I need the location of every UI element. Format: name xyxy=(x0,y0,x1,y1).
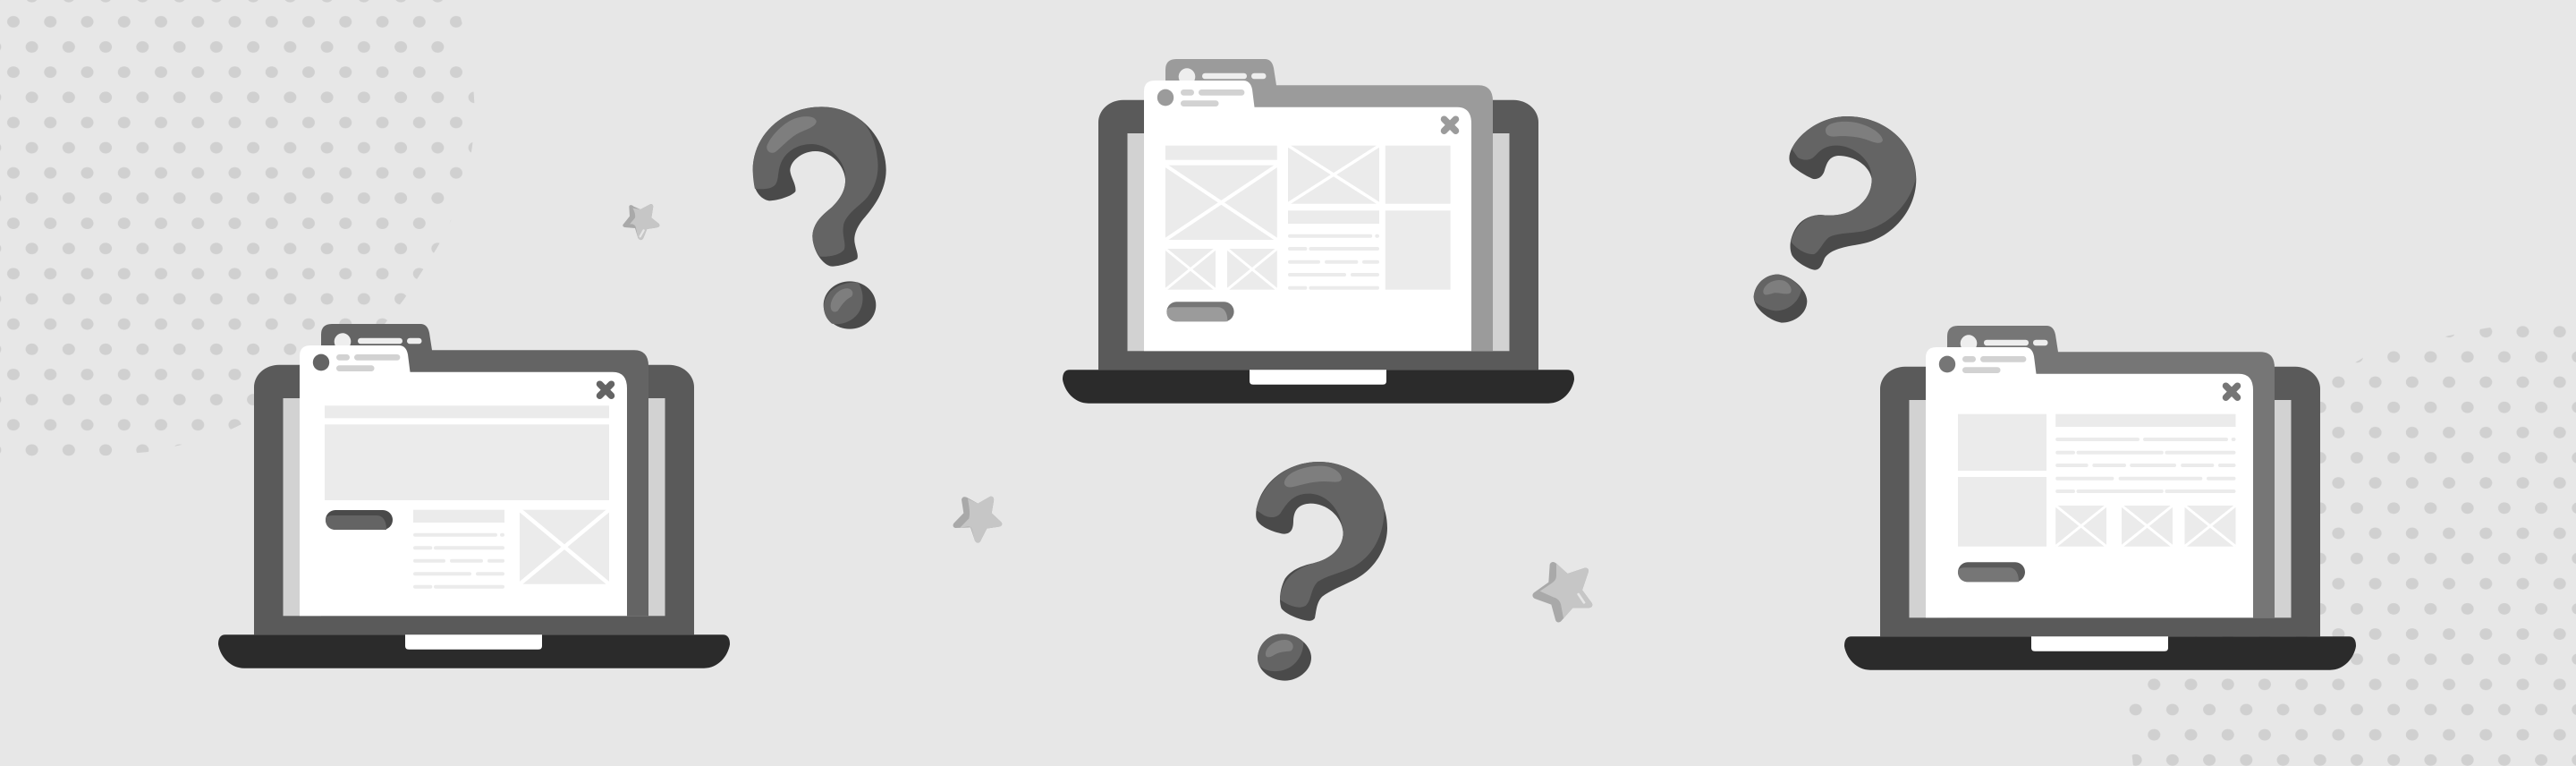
button xyxy=(1958,562,2025,582)
icon: close xyxy=(1444,119,1456,131)
dotted blob: top left xyxy=(0,0,475,465)
laptop base xyxy=(1063,370,1574,404)
laptop screen xyxy=(283,398,665,616)
laptop screen xyxy=(1909,400,2292,617)
laptop notch xyxy=(2031,636,2168,651)
text lines xyxy=(2057,439,2234,491)
text lines xyxy=(1290,236,1377,288)
large image placeholder xyxy=(1165,166,1277,240)
dotted blob: bottom right xyxy=(2127,315,2576,766)
laptop notch xyxy=(405,634,542,650)
button xyxy=(1166,302,1234,321)
small image placeholder 1 xyxy=(1165,249,1216,290)
front browser window xyxy=(1926,347,2253,617)
back browser window xyxy=(1947,326,2275,617)
question mark: upper right xyxy=(1754,116,1916,323)
front browser window xyxy=(300,345,627,616)
star: upper left xyxy=(623,204,659,240)
laptop base xyxy=(1844,636,2356,670)
icon: close xyxy=(2225,386,2238,397)
square placeholder 1 xyxy=(1958,414,2046,471)
star: lower left xyxy=(953,497,1002,543)
small image placeholder 2 xyxy=(1227,249,1277,290)
square placeholder 1 xyxy=(1385,146,1451,204)
laptop lid xyxy=(1880,367,2320,636)
laptop: center xyxy=(1063,59,1574,404)
question mark: bottom center xyxy=(1256,462,1387,681)
image placeholder 1 xyxy=(2055,506,2106,547)
laptop: right xyxy=(1844,326,2356,670)
image placeholder 3 xyxy=(2184,506,2236,547)
front browser window xyxy=(1144,81,1471,351)
title bar placeholder xyxy=(325,405,609,418)
text lines xyxy=(415,535,503,587)
laptop screen xyxy=(1127,133,1510,351)
question mark: upper left xyxy=(753,106,886,329)
image placeholder 2 xyxy=(2122,506,2173,547)
medium image placeholder xyxy=(1288,146,1379,204)
laptop: left xyxy=(218,324,730,668)
laptop lid xyxy=(254,365,694,634)
heading placeholder xyxy=(413,510,504,523)
heading placeholder xyxy=(1165,146,1277,160)
button xyxy=(326,510,393,530)
back browser window xyxy=(1165,59,1493,351)
icon: close xyxy=(599,384,612,396)
subheading placeholder xyxy=(1288,210,1379,224)
hero placeholder xyxy=(325,424,609,500)
square placeholder 2 xyxy=(1385,210,1451,290)
star: lower right xyxy=(1532,562,1592,623)
laptop lid xyxy=(1098,100,1538,370)
laptop notch xyxy=(1250,370,1386,385)
laptop base xyxy=(218,634,730,668)
heading placeholder xyxy=(2055,414,2236,427)
back browser window xyxy=(321,324,648,616)
image placeholder xyxy=(520,510,609,584)
square placeholder 2 xyxy=(1958,477,2046,547)
